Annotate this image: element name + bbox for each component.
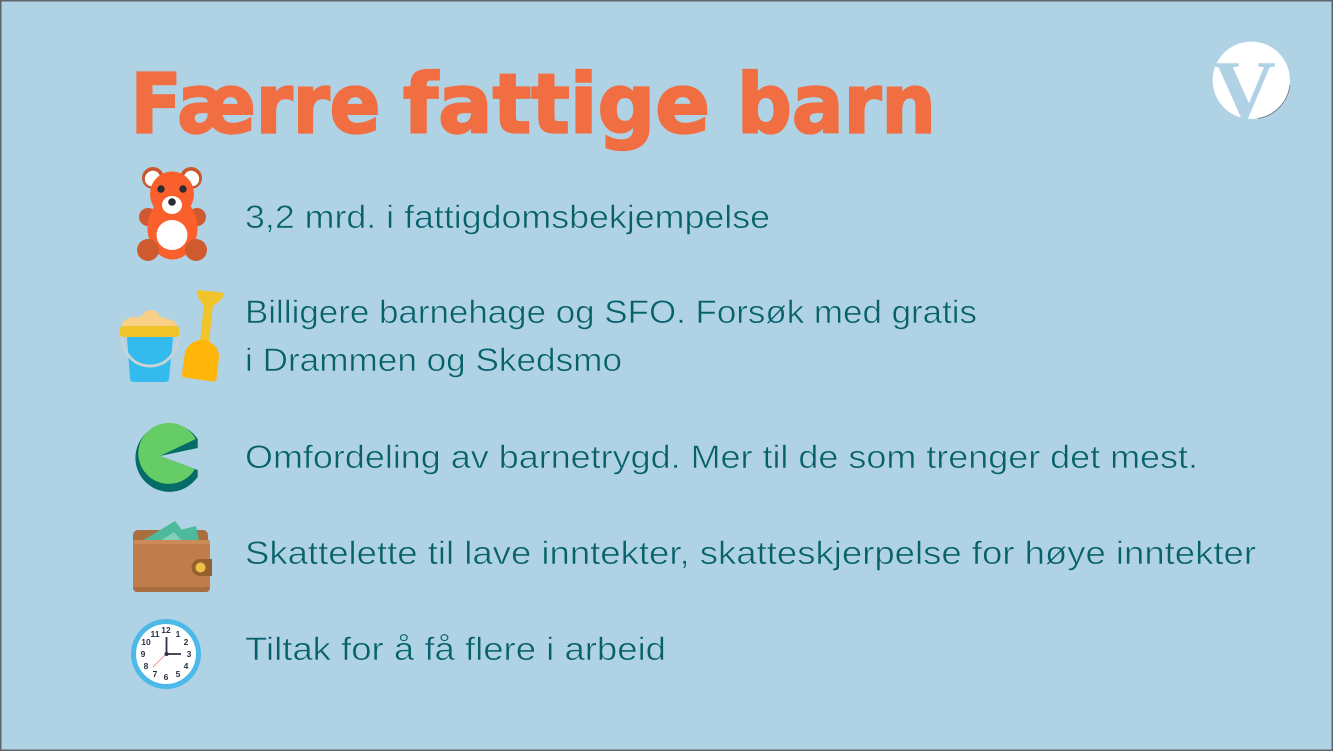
title: Færre [130, 58, 380, 152]
text: kindergarten and after-school: i Drammen og Skedsmo [245, 342, 622, 378]
icon: bucket and spade [120, 290, 224, 382]
text: kindergarten and after-school [245, 294, 977, 378]
icon: clock: 6 [164, 672, 169, 682]
icon: clock: 7 [153, 669, 158, 679]
icon: clock: 8 [144, 661, 149, 671]
icon: clock: 10 [141, 637, 151, 647]
icon: teddy bear [137, 167, 207, 261]
icon: wallet [133, 521, 212, 592]
icon: green pie chart [135, 423, 198, 492]
icon: clock: 9 [141, 649, 146, 659]
icon: clock [131, 619, 201, 689]
icon: clock: 5 [176, 669, 181, 679]
logo: V in white circle: V [1213, 44, 1276, 137]
text: employment: Tiltak for å få flere i arbeid [245, 631, 666, 667]
icon: clock: 2 [184, 637, 189, 647]
icon: clock: 11 [150, 629, 160, 639]
text: kindergarten and after-school: Billigere barnehage og SFO. Forsøk med gratis [245, 294, 977, 330]
title [130, 58, 936, 152]
icon: clock: 12 [161, 625, 171, 635]
title: barn [737, 58, 936, 152]
text: taxes: Skattelette til lave inntekter, skatteskjerpelse for høye inntekter [245, 535, 1256, 571]
icon: clock: 4 [184, 661, 189, 671]
text: poverty funding: 3,2 mrd. i fattigdomsbekjempelse [245, 199, 770, 235]
text: child benefit: Omfordeling av barnetrygd. Mer til de som trenger det mest. [245, 439, 1198, 475]
icon: clock: 1 [176, 629, 181, 639]
title: fattige [403, 58, 710, 152]
icon: clock: 3 [187, 649, 192, 659]
